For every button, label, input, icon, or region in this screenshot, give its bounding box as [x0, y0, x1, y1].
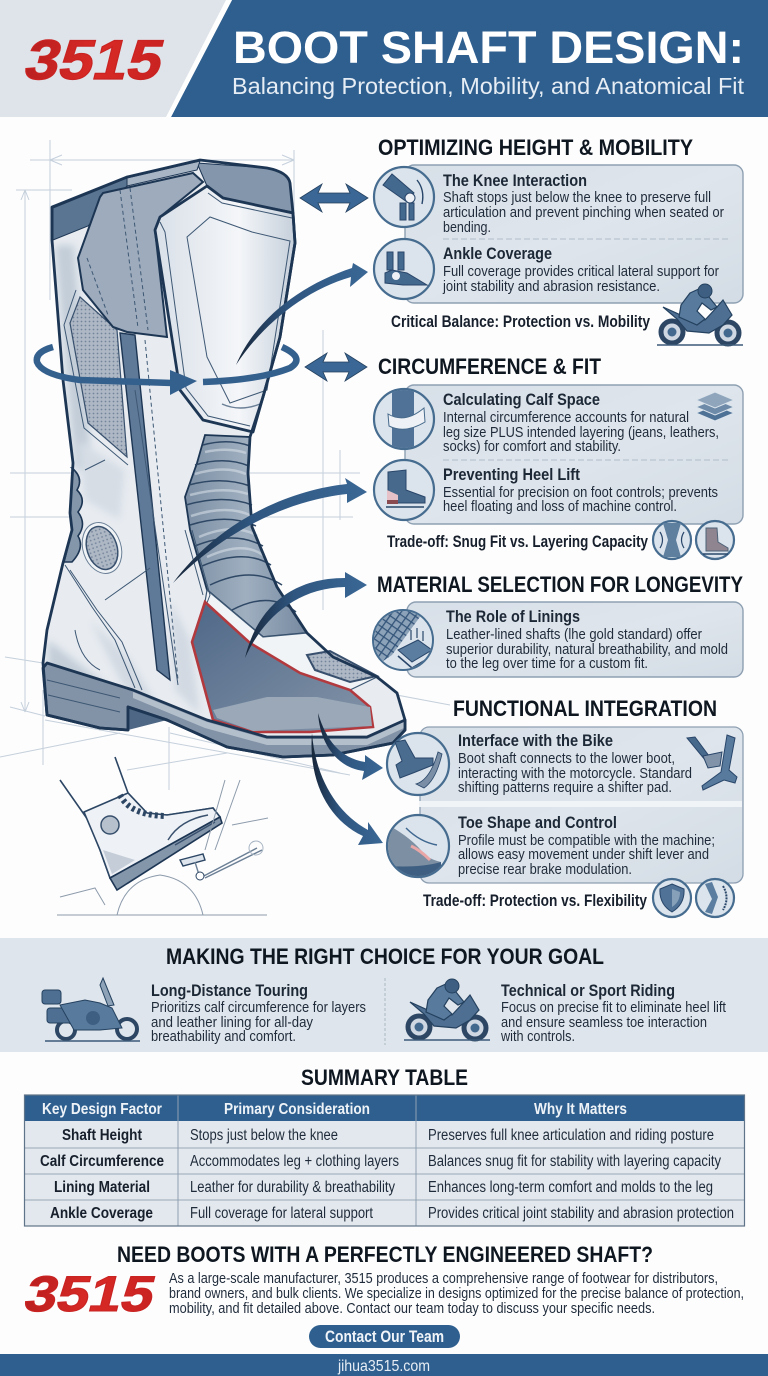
boot outline	[43, 160, 405, 757]
row: calf circumference: Calf Circumference	[40, 1153, 164, 1170]
text: toe shape and control	[458, 813, 715, 878]
text: technical or sport riding	[500, 981, 727, 1045]
row: shaft height	[62, 1127, 714, 1144]
heading: call to action: NEED BOOTS WITH A PERFECTLY ENGINEERED SHAFT?	[117, 1242, 653, 1267]
text: the knee interaction: Shaft stops just below the knee to preserve full	[443, 189, 711, 206]
toe mesh	[307, 651, 377, 682]
knee plate	[155, 186, 295, 432]
illustration: cutaway motorcycle boot	[43, 160, 405, 757]
panel: making the right choice	[0, 938, 768, 1052]
soft shading	[48, 245, 200, 715]
table header row: Primary Consideration	[224, 1101, 370, 1118]
text: toe shape and control: allows easy movement under shift lever and	[458, 846, 709, 863]
callout: protection trade-off: Trade-off: Protection vs. Flexibility	[423, 892, 648, 910]
text: interface with the bike	[458, 731, 692, 796]
icon: sport motorcycle	[657, 284, 743, 345]
text: long-distance touring: Prioritizs calf circumference for layers	[151, 999, 366, 1016]
icon: boot heel	[374, 460, 434, 520]
text: preventing heel lift: Essential for precision on foot controls; prevents	[443, 484, 718, 501]
arrow: calf double arrow	[305, 353, 367, 381]
panel: optimizing height and mobility	[374, 135, 743, 345]
heading: OPTIMIZING HEIGHT & MOBILITY	[378, 135, 693, 160]
button: contact our team	[309, 1325, 460, 1348]
text: ankle coverage: joint stability and abrasion resistance.	[442, 278, 660, 295]
heading: FUNCTIONAL INTEGRATION	[453, 696, 717, 721]
text: technical or sport riding: Technical or Sport Riding	[501, 981, 675, 1000]
arrow: to ankle	[236, 263, 368, 365]
text: calculating calf space: leg size PLUS intended layering (jeans, leathers,	[443, 424, 719, 441]
row: lining material: Enhances long-term comfort and molds to the leg	[428, 1179, 713, 1196]
text: long-distance touring	[151, 981, 366, 1045]
construction lines behind boot	[0, 140, 450, 790]
text: technical or sport riding: Focus on precise fit to eliminate heel lift	[501, 999, 727, 1016]
arrow: to heel lift	[173, 478, 367, 583]
icon: lining mesh	[373, 610, 433, 670]
arrow: to bike interface	[318, 713, 383, 780]
text: the role of linings: The Role of Linings	[446, 607, 580, 626]
heading: MAKING THE RIGHT CHOICE FOR YOUR GOAL	[166, 944, 604, 969]
header banner	[0, 0, 768, 117]
row: shaft height: Shaft Height	[62, 1127, 143, 1144]
table: summary	[24, 1095, 744, 1226]
footer bar	[0, 1354, 768, 1376]
text: ankle coverage	[442, 244, 719, 295]
text: the role of linings: to the leg over time for a custom fit.	[446, 655, 648, 672]
row: shaft height: Preserves full knee articulation and riding posture	[428, 1127, 714, 1144]
boot silhouette	[43, 160, 405, 757]
text: calculating calf space: socks) for comfort and stability.	[443, 438, 621, 455]
row: lining material	[54, 1179, 713, 1196]
panel: circumference and fit	[374, 354, 743, 559]
text: long-distance touring: Long-Distance Touring	[151, 981, 308, 1000]
panel: functional integration	[385, 696, 743, 917]
footer bar: jihua3515.com	[337, 1358, 430, 1375]
icon: touring motorcycle	[42, 978, 140, 1041]
text: preventing heel lift: Preventing Heel Lift	[443, 465, 580, 484]
text: calculating calf space	[443, 390, 719, 455]
row: lining material: Lining Material	[54, 1179, 150, 1196]
text: interface with the bike: shifting patterns require a shifter pad.	[458, 779, 672, 796]
shin flap	[78, 173, 203, 337]
table header row: Why It Matters	[534, 1101, 627, 1118]
white trim along cutaway	[205, 590, 377, 690]
icon: boot layering	[696, 521, 734, 559]
table header row: Key Design Factor	[42, 1101, 162, 1118]
text: interface with the bike: interacting with the motorcycle. Standard	[458, 765, 692, 782]
title: BOOT SHAFT DESIGN:	[233, 22, 744, 73]
panel: material selection	[373, 572, 743, 677]
text: ankle coverage: Ankle Coverage	[443, 244, 552, 263]
left collar	[53, 178, 127, 240]
text: the knee interaction: articulation and prevent pinching when seated or	[443, 204, 724, 221]
row: ankle coverage	[50, 1205, 734, 1222]
callout: snug fit trade-off: Trade-off: Snug Fit vs. Layering Capacity	[387, 533, 649, 551]
text: the role of linings	[446, 607, 728, 672]
row: calf circumference: Balances snug fit for stability with layering capacity	[428, 1153, 721, 1170]
sole	[43, 663, 405, 757]
red-lined cutaway	[192, 602, 373, 732]
icon: toe shape	[385, 815, 449, 882]
lower shell details	[65, 530, 210, 690]
logo: 3515 header: 3515	[19, 30, 170, 92]
icon: snug calf	[653, 521, 691, 559]
text: technical or sport riding: with controls.	[500, 1028, 575, 1045]
icon: shield	[653, 879, 691, 917]
icon: knee	[374, 167, 434, 227]
text: manufacturer description: mobility, and fit detailed above. Contact our team today to discuss your specific needs.	[169, 1300, 655, 1317]
logo: 3515 footer: 3515	[19, 1266, 161, 1322]
row: calf circumference: Accommodates leg + clothing layers	[190, 1153, 399, 1170]
text: interface with the bike: Boot shaft connects to the lower boot,	[458, 750, 675, 767]
text: technical or sport riding: and ensure seamless toe interaction	[501, 1014, 707, 1031]
row: lining material: Leather for durability & breathability	[190, 1179, 395, 1196]
ankle puck	[76, 517, 128, 579]
button: contact our team: Contact Our Team	[325, 1328, 444, 1346]
text: long-distance touring: breathability and comfort.	[151, 1028, 296, 1045]
icon: pedal	[687, 735, 737, 790]
text: preventing heel lift	[443, 465, 718, 515]
heading: CIRCUMFERENCE & FIT	[378, 354, 601, 379]
table header row	[42, 1101, 627, 1118]
text: interface with the bike: Interface with the Bike	[458, 731, 613, 750]
arrow: to linings	[245, 572, 367, 658]
row: calf circumference	[40, 1153, 721, 1170]
ribbed calf	[185, 435, 307, 637]
icon: flexible joint	[696, 879, 734, 917]
left calf bumps	[64, 468, 82, 562]
arrow: to toe	[311, 733, 383, 845]
text: toe shape and control: Profile must be compatible with the machine;	[458, 832, 715, 849]
icon: boot on lever	[387, 733, 449, 795]
illustration: boot on shifter pedal	[57, 757, 268, 915]
arrow: knee double arrow	[300, 184, 368, 212]
icon: layers	[696, 392, 734, 421]
icon: ankle	[374, 239, 434, 299]
inner shield	[187, 217, 290, 403]
subtitle: Balancing Protection, Mobility, and Anatomical Fit	[232, 73, 744, 99]
text: the role of linings: superior durability, natural breathability, and mold	[446, 641, 728, 658]
text: the knee interaction: The Knee Interaction	[443, 171, 587, 190]
row: ankle coverage: Full coverage for lateral support	[190, 1205, 374, 1222]
mesh side panel	[70, 297, 127, 457]
arrow: shaft ring	[37, 347, 296, 395]
row: shaft height: Stops just below the knee	[190, 1127, 338, 1144]
text: toe shape and control: Toe Shape and Control	[458, 813, 617, 832]
text: the role of linings: Leather-lined shafts (lhe gold standard) offer	[446, 626, 702, 643]
icon: calf tape measure	[374, 389, 434, 449]
text: manufacturer description	[169, 1270, 744, 1317]
text: the knee interaction	[443, 171, 724, 236]
heading: summary table: SUMMARY TABLE	[301, 1065, 468, 1090]
text: the knee interaction: bending.	[443, 219, 491, 236]
row: ankle coverage: Ankle Coverage	[50, 1205, 153, 1222]
zipper strip	[120, 333, 170, 680]
text: calculating calf space: Internal circumference accounts for natural	[443, 409, 689, 426]
icon: sport motorcycle	[404, 979, 490, 1040]
text: toe shape and control: precise rear brake modulation.	[458, 861, 632, 878]
right collar	[197, 163, 293, 212]
heel wedge	[128, 707, 167, 730]
text: preventing heel lift: heel floating and loss of machine control.	[443, 498, 677, 515]
text: calculating calf space: Calculating Calf Space	[443, 390, 600, 409]
callout: critical balance: Critical Balance: Protection vs. Mobility	[391, 313, 651, 331]
text: long-distance touring: and leather lining for all-day	[151, 1014, 313, 1031]
text: ankle coverage: Full coverage provides critical lateral support for	[443, 263, 719, 280]
